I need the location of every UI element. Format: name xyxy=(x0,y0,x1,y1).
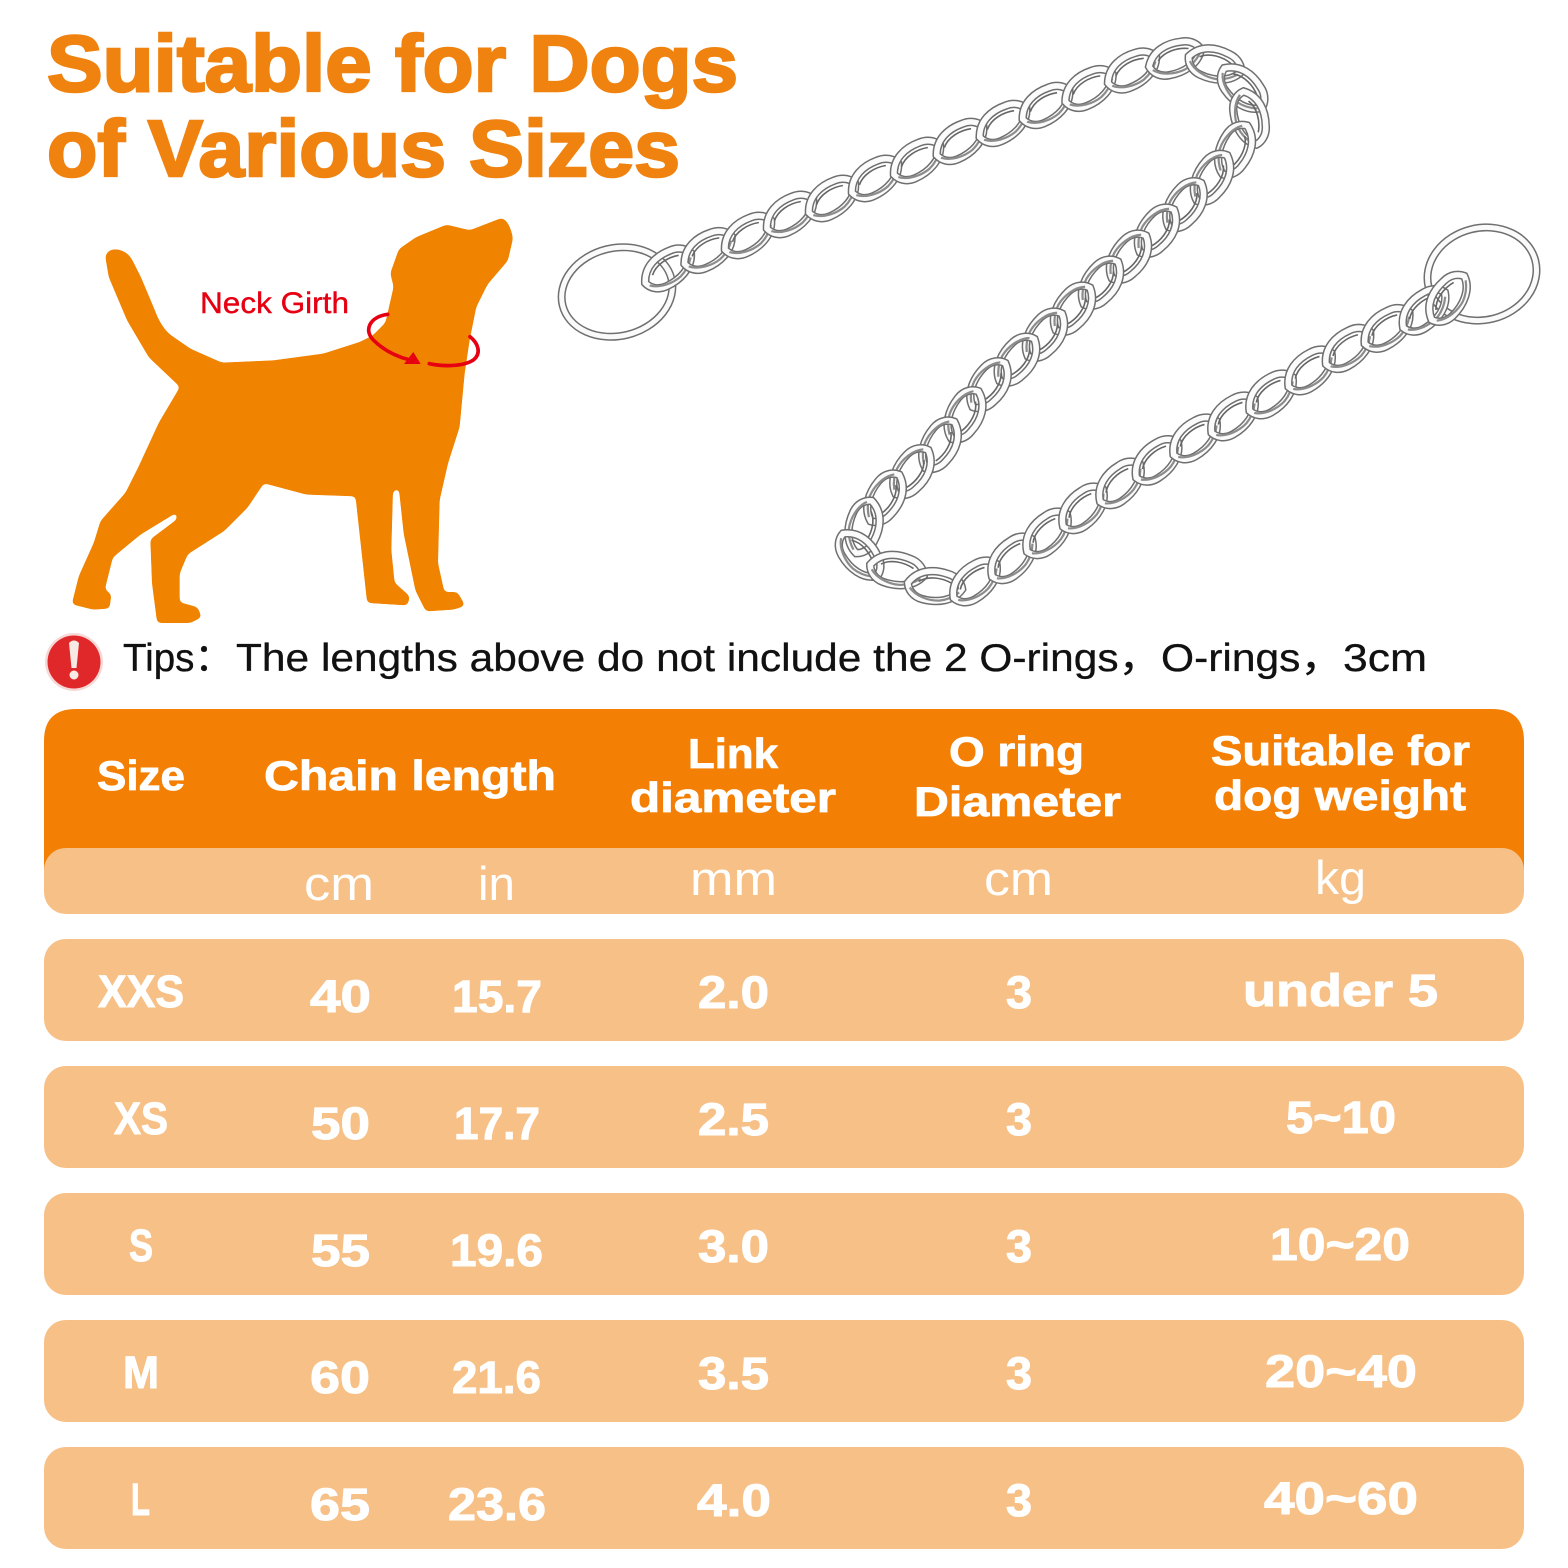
table row: S: 10~20 xyxy=(1270,1219,1410,1270)
table row: XS: 5~10 xyxy=(1286,1092,1396,1143)
chain links xyxy=(637,38,1478,608)
header: suitable for dog weight xyxy=(1211,727,1470,819)
table row: L: 65 xyxy=(310,1479,370,1530)
table row: L: 3 xyxy=(1006,1475,1032,1526)
table row: XXS: under 5 xyxy=(1243,965,1438,1016)
neck girth arc xyxy=(369,314,478,366)
tips text: 3cm xyxy=(1343,637,1427,680)
header: suitable for dog weight: Suitable for xyxy=(1211,727,1470,774)
title: of Various Sizes xyxy=(47,104,680,193)
tips text: Tips： xyxy=(123,637,233,680)
units row: in xyxy=(478,857,515,910)
table row: XXS: XXS xyxy=(98,966,184,1017)
arrowhead xyxy=(404,352,421,364)
tips text xyxy=(123,637,1427,680)
units band xyxy=(44,848,1524,914)
icon: warning exclamation xyxy=(45,633,103,691)
neck girth label: Neck Girth xyxy=(200,287,349,320)
header background xyxy=(44,709,1524,880)
title xyxy=(47,19,738,193)
table row: M: 3 xyxy=(1006,1348,1032,1399)
header: link diameter xyxy=(630,730,836,821)
table row: S: S xyxy=(129,1220,153,1271)
table row: L xyxy=(44,1447,1524,1549)
header: chain length: Chain length xyxy=(264,752,556,799)
table header xyxy=(44,709,1524,914)
table row: XXS xyxy=(44,939,1524,1041)
units row: kg xyxy=(1315,851,1366,904)
header: link diameter: diameter xyxy=(630,774,836,821)
table row: M: M xyxy=(123,1347,159,1398)
units row xyxy=(304,851,1366,910)
table row: XXS: 3 xyxy=(1006,967,1032,1018)
left O-ring xyxy=(552,236,682,348)
table row: L: 40~60 xyxy=(1264,1473,1418,1524)
header: O ring diameter: Diameter xyxy=(914,778,1121,825)
table row: S: 3.0 xyxy=(698,1221,769,1272)
units row: mm xyxy=(690,852,777,905)
table row: S: 55 xyxy=(311,1225,370,1276)
table row: L: 4.0 xyxy=(697,1475,771,1526)
units row: cm xyxy=(984,852,1053,905)
table row: M: 3.5 xyxy=(698,1348,769,1399)
table row: L: 23.6 xyxy=(448,1479,546,1530)
tips text: The lengths above do not include the 2 O-rings， xyxy=(236,637,1161,680)
table row: S: 3 xyxy=(1006,1221,1032,1272)
table row: M xyxy=(44,1320,1524,1422)
header: size: Size xyxy=(97,752,185,799)
table row: L: L xyxy=(131,1474,150,1525)
table row: XS xyxy=(44,1066,1524,1168)
header: link diameter: Link xyxy=(688,730,779,777)
table row: M: 20~40 xyxy=(1265,1346,1417,1397)
icon: dog silhouette with neck girth marker xyxy=(73,219,512,622)
units row: cm xyxy=(304,857,374,910)
dog silhouette xyxy=(73,219,512,622)
table row: XS: 3 xyxy=(1006,1094,1032,1145)
table row: S: 19.6 xyxy=(450,1225,543,1276)
chain collar illustration xyxy=(552,38,1546,608)
header: suitable for dog weight: dog weight xyxy=(1214,772,1466,819)
table row: XXS: 2.0 xyxy=(698,967,769,1018)
table row: XXS: 40 xyxy=(310,971,371,1022)
right O-ring xyxy=(1418,216,1546,332)
title: Suitable for Dogs xyxy=(47,19,738,108)
tips text: O-rings， xyxy=(1161,637,1343,680)
header: O ring diameter xyxy=(914,728,1121,825)
table row: XXS: 15.7 xyxy=(452,971,542,1022)
table row: XS: 17.7 xyxy=(454,1098,540,1149)
table row: M: 21.6 xyxy=(452,1352,541,1403)
table row: XS: 2.5 xyxy=(698,1094,769,1145)
table row: XS: XS xyxy=(114,1093,168,1144)
header: O ring diameter: O ring xyxy=(949,728,1084,775)
table row: XS: 50 xyxy=(311,1098,370,1149)
table row: S xyxy=(44,1193,1524,1295)
table row: M: 60 xyxy=(310,1352,370,1403)
